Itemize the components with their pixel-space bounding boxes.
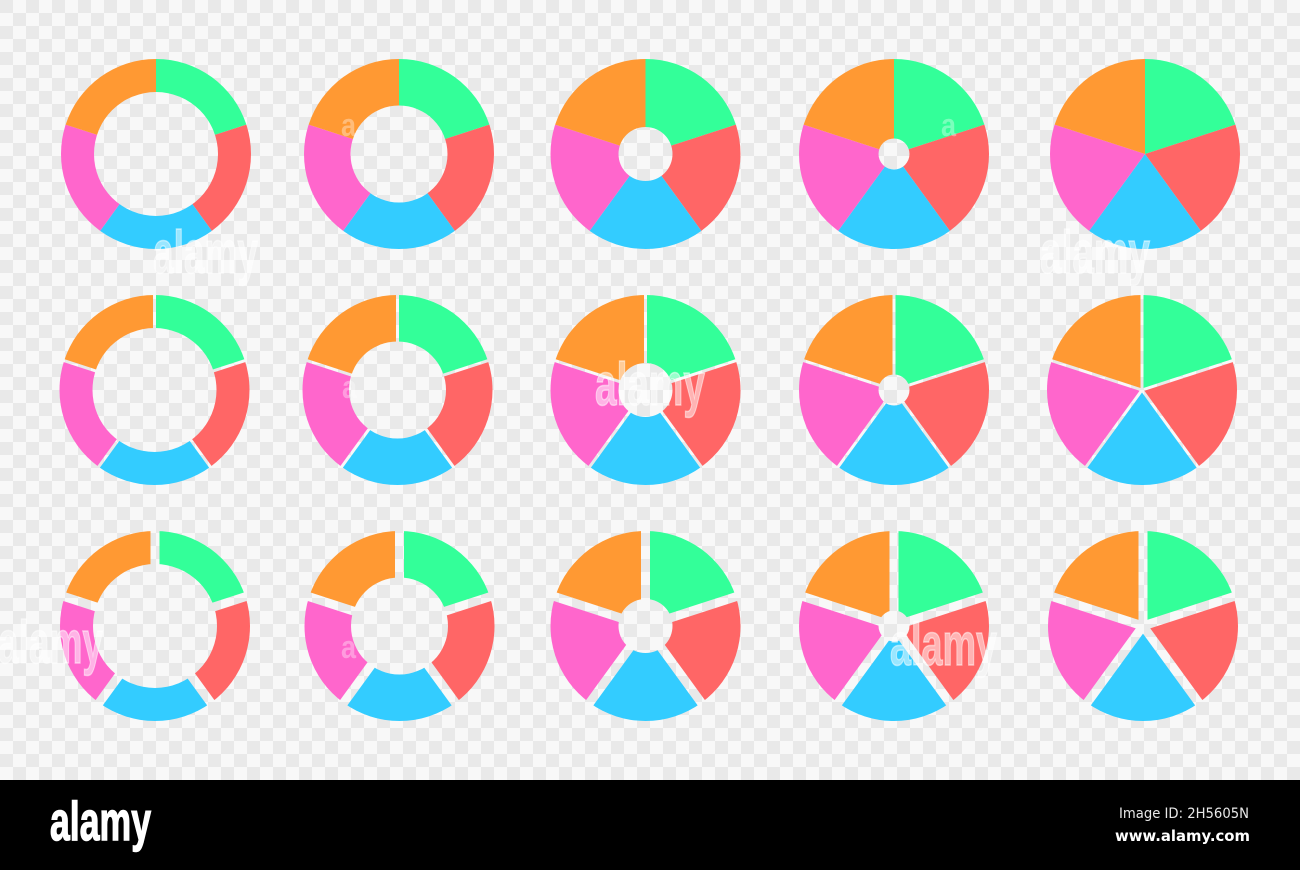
row 1: donut and pie charts without gaps — [61, 59, 1240, 249]
chart: thin donut, row 3 — [60, 531, 250, 721]
chart: thin donut, row 1 — [61, 59, 251, 249]
watermarks: alamy — [595, 351, 705, 418]
watermarks: a — [941, 107, 956, 143]
chart: medium donut, row 2 — [302, 295, 493, 485]
footer bar — [0, 780, 1300, 870]
chart: full pie, row 1 — [1050, 59, 1240, 249]
chart: thick donut, row 2 — [550, 295, 741, 485]
watermarks: alamy — [890, 611, 997, 678]
website: www.alamy.com — [1115, 827, 1250, 845]
logo: alamy: alamy — [50, 790, 151, 852]
watermarks — [0, 107, 1150, 678]
watermarks: alamy — [153, 219, 258, 286]
watermarks: alamy — [1040, 219, 1150, 286]
chart: small-hole donut, row 1 — [799, 59, 989, 249]
watermarks: a — [341, 629, 356, 665]
chart: medium donut, row 1 — [304, 59, 494, 249]
watermarks: alamy — [0, 609, 103, 676]
image id: Image ID: 2H5605N — [1119, 806, 1249, 822]
chart: thin donut, row 2 — [59, 295, 250, 485]
chart: thick donut, row 3 — [550, 531, 741, 721]
watermarks: a — [342, 369, 357, 405]
chart: small-hole donut, row 3 — [799, 531, 989, 721]
chart: thick donut, row 1 — [550, 59, 741, 249]
chart: full pie, row 2 — [1047, 295, 1237, 485]
chart: full pie, row 3 — [1048, 531, 1238, 721]
row 2: charts with thin separators — [59, 295, 1237, 485]
row 3: charts with wide separators — [60, 531, 1238, 721]
chart: medium donut, row 3 — [304, 531, 495, 721]
watermarks: a — [341, 107, 356, 143]
chart: small-hole donut, row 2 — [799, 295, 989, 485]
